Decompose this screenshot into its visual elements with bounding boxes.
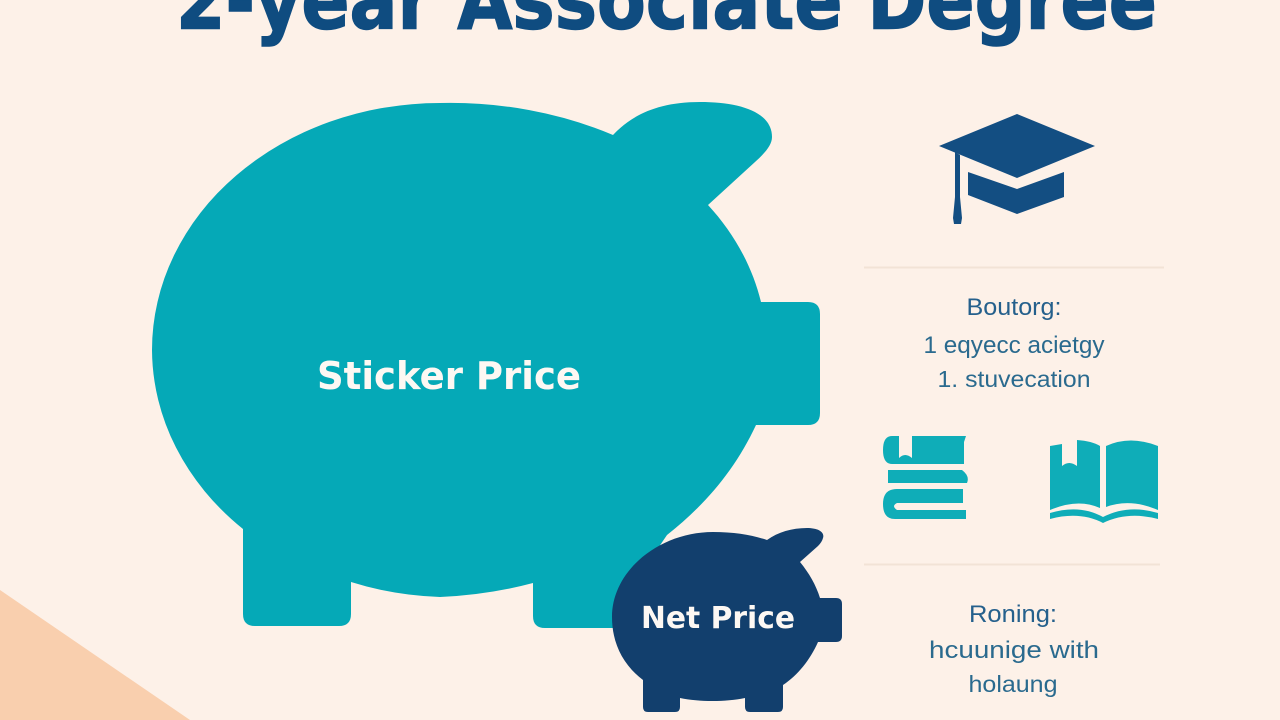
label: sticker price: Sticker Price — [317, 354, 581, 398]
text block: lower caption: Roning: — [969, 601, 1057, 628]
icon: stack of books — [883, 436, 968, 519]
icon: graduation cap — [939, 114, 1095, 224]
text block: upper caption — [924, 294, 1104, 392]
corner accent: peach triangle — [0, 590, 190, 720]
text block: upper caption: 1. stuvecation — [938, 366, 1090, 392]
text block: lower caption: holaung — [968, 671, 1058, 697]
text block: lower caption — [929, 601, 1099, 697]
text block: lower caption: hcuunige with — [929, 637, 1099, 664]
divider — [864, 564, 1160, 566]
label: net price: Net Price — [641, 601, 795, 636]
divider — [864, 266, 1164, 268]
icon: open book — [1050, 440, 1158, 523]
small piggy bank: net price — [612, 528, 842, 712]
text block: upper caption: 1 eqyecc acietgy — [924, 332, 1104, 359]
text block: upper caption: Boutorg: — [966, 294, 1062, 321]
